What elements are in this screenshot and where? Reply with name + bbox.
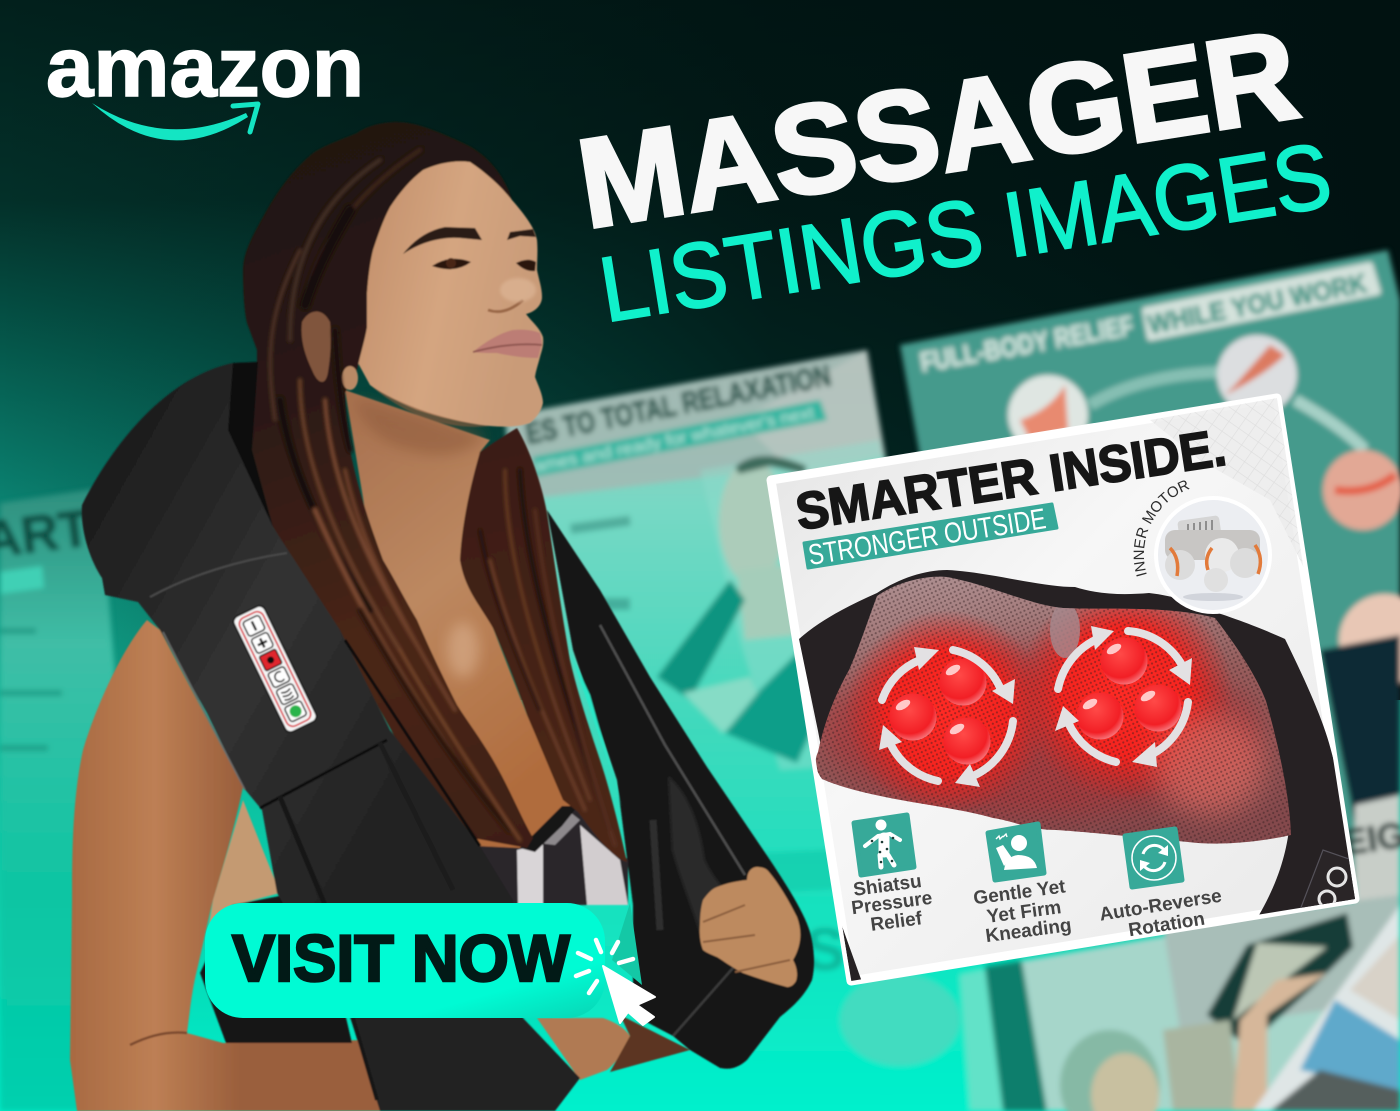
- visit now button: [205, 903, 655, 1025]
- red massage balls right: [1076, 638, 1182, 740]
- slide: total relaxation: ES TO TOTAL RELAXATION: [523, 359, 834, 451]
- blurred background slides: [0, 250, 1400, 1111]
- inner motor label: INNER MOTOR: [1134, 480, 1190, 576]
- feature: gentle yet firm kneading: Gentle Yet: [972, 876, 1067, 909]
- heat glow right: [1028, 608, 1227, 794]
- massager left band: [82, 362, 580, 1111]
- icon: person neck massage: [988, 824, 1044, 880]
- jaw shadow: [370, 385, 490, 427]
- icon: body pressure points: [854, 815, 914, 875]
- neck and chest: [345, 390, 575, 852]
- bikini top: [477, 805, 628, 905]
- slide: total relaxation: [505, 350, 1010, 1111]
- forearm shadow: [610, 1015, 690, 1072]
- torso patch: [205, 800, 280, 950]
- slide: total relaxation: ames and ready for whatever's next: [532, 403, 816, 476]
- red massage balls left: [890, 658, 990, 764]
- band stitching: [150, 553, 480, 1100]
- feature: shiatsu pressure relief: [848, 815, 936, 938]
- slide: total relaxation: SI: [805, 916, 862, 983]
- feature: shiatsu pressure relief: Shiatsu: [852, 871, 923, 901]
- slide: full-body relief: WHILE YOU WORK: [1145, 268, 1370, 340]
- icon: click sparks: [576, 940, 633, 993]
- background gap highlights: [612, 903, 642, 985]
- card subheading banner: STRONGER OUTSIDE: [806, 503, 1048, 572]
- elbow crease: [130, 1032, 187, 1045]
- panel: product card: [766, 394, 1360, 986]
- icon: rotation circle: [1125, 829, 1182, 887]
- eyebrows: [403, 227, 536, 254]
- feature: shiatsu pressure relief: Relief: [869, 908, 924, 936]
- neck shadow: [355, 400, 485, 455]
- feature: auto-reverse rotation: Auto-Reverse: [1098, 886, 1223, 926]
- card headline: SMARTER INSIDE.: [792, 419, 1230, 542]
- icon: cursor: [603, 966, 655, 1025]
- massager left lower strap: [842, 926, 861, 981]
- feature: gentle yet firm kneading: Kneading: [984, 915, 1073, 947]
- right hair lock: [460, 428, 627, 862]
- card corner texture: [1150, 398, 1305, 570]
- slide person: [657, 440, 925, 770]
- hair strands: [270, 150, 520, 840]
- controller on massager: [1300, 850, 1358, 910]
- hand: [700, 867, 800, 987]
- massager mesh: [816, 576, 1291, 844]
- arm: [70, 620, 392, 1111]
- slide: bottom right photos: [960, 895, 1400, 1111]
- amazon logo: amazon: [46, 20, 364, 114]
- rotation arrows right: [1055, 626, 1192, 767]
- strap gap highlight: [570, 652, 622, 808]
- massager right strap: [547, 510, 814, 1069]
- band top shade: [228, 362, 273, 527]
- center fold: [1050, 602, 1080, 658]
- feature: auto-reverse rotation: Rotation: [1127, 909, 1206, 941]
- massager product dark band: [799, 570, 1365, 925]
- chest highlight: [447, 622, 479, 678]
- slide: full-body relief: [900, 250, 1400, 925]
- dark shape behind button: [200, 895, 352, 1043]
- visit now button: VISIT NOW: [232, 921, 571, 995]
- feature: auto-reverse rotation: [1098, 829, 1226, 945]
- feature: shiatsu pressure relief: Pressure: [850, 888, 933, 919]
- subtitle: LISTINGS IMAGES: [593, 124, 1338, 342]
- left hair: [228, 122, 533, 848]
- icon: amazon smile arrow: [92, 103, 258, 140]
- inner motor inset: [1134, 480, 1272, 614]
- feature: gentle yet firm kneading: Yet Firm: [986, 897, 1063, 928]
- face: [340, 150, 543, 427]
- heat glow left: [851, 614, 1039, 809]
- slide: left partial: [0, 488, 150, 1111]
- main title: MASSAGER: [569, 3, 1306, 255]
- feature: gentle yet firm kneading: [972, 824, 1073, 948]
- ear: [302, 311, 358, 390]
- slide: full-body relief: FULL-BODY RELIEF: [918, 310, 1136, 378]
- forearm behind band: [537, 1018, 630, 1080]
- woman with shoulder massager: [70, 122, 814, 1111]
- massager control panel: [232, 604, 318, 734]
- rotation arrows left: [879, 647, 1015, 787]
- nose and mouth details: [473, 278, 542, 358]
- eyes: [432, 258, 536, 271]
